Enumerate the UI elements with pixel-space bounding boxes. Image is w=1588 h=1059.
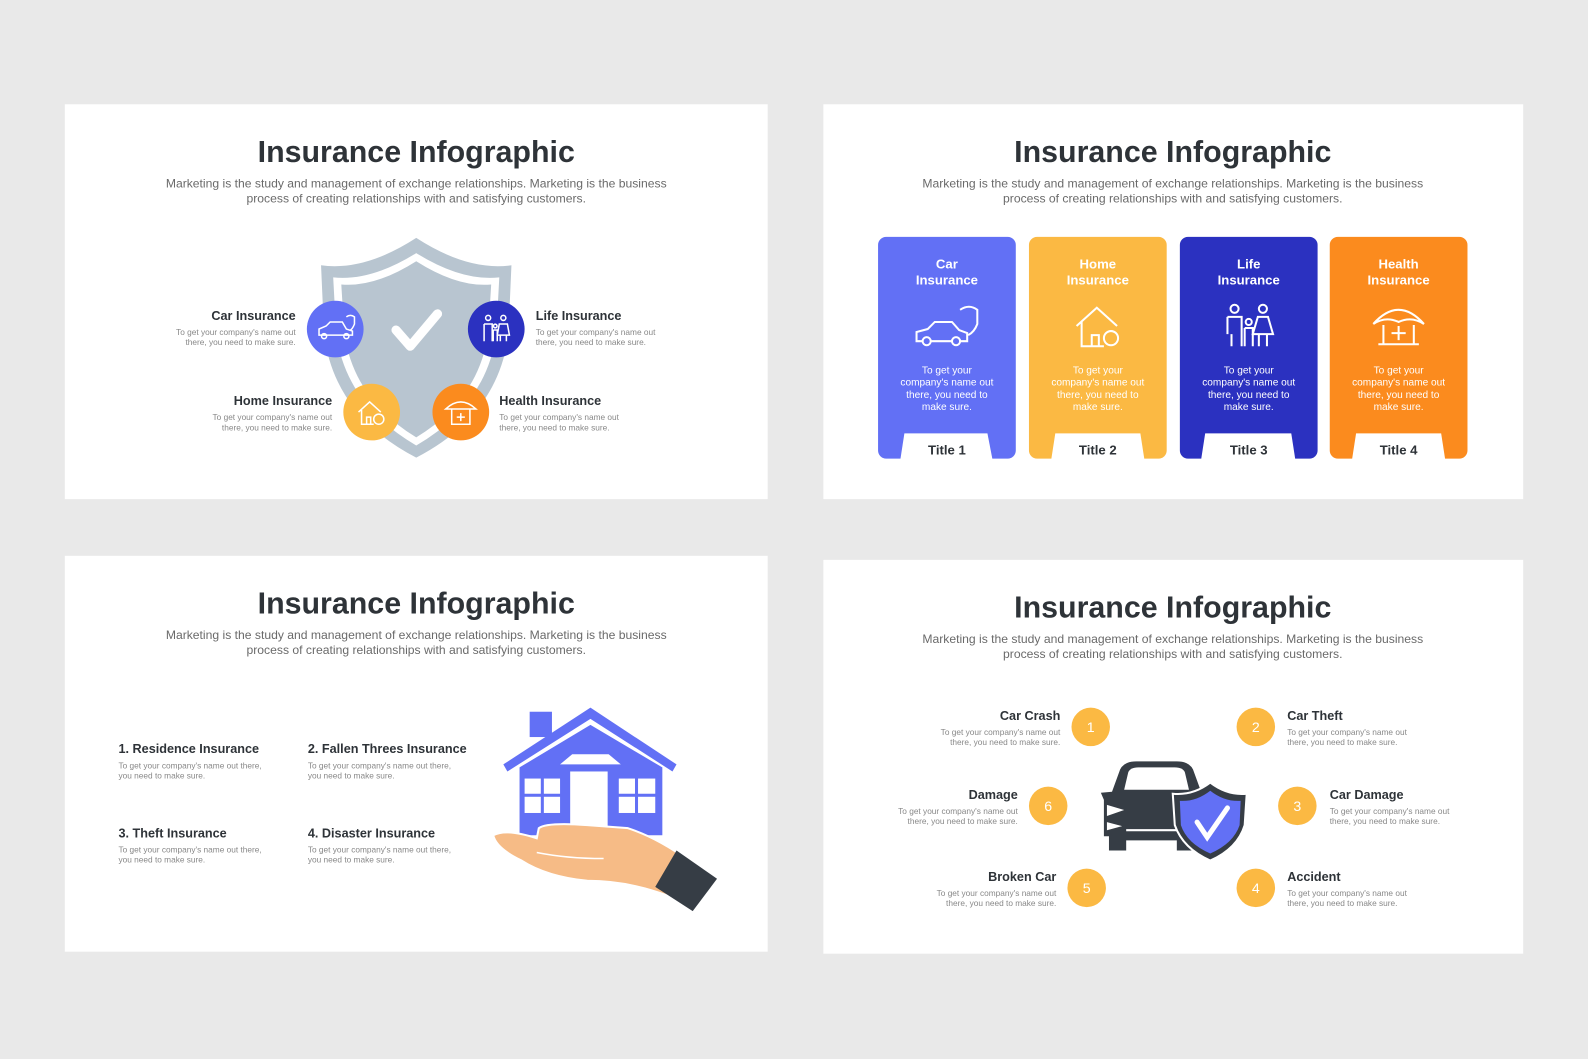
text: car insurance: Car Insurance (211, 309, 296, 323)
card: home insurance: there, you need to (1057, 390, 1139, 401)
text: theft insurance: you need to make sure. (118, 855, 205, 865)
text: residence insurance (118, 742, 262, 781)
text: home insurance: To get your company's name out (213, 412, 333, 422)
subtitle (922, 176, 1423, 205)
subtitle: process of creating relationships with and satisfying customers. (246, 191, 586, 205)
step 4 accident: Accident (1287, 870, 1341, 884)
step 5 broken car: To get your company's name out (937, 888, 1057, 898)
step 3 car damage: there, you need to make sure. (1330, 816, 1440, 826)
step 4 accident (1237, 869, 1408, 908)
card: home insurance (1029, 237, 1167, 460)
card: health insurance (1330, 237, 1467, 460)
text: home insurance (213, 394, 333, 432)
card: health insurance: make sure. (1374, 402, 1424, 413)
step 4 accident: To get your company's name out (1287, 888, 1408, 898)
panel: cards (823, 104, 1523, 499)
step 2 car theft: there, you need to make sure. (1287, 737, 1397, 747)
text: car insurance (176, 309, 296, 347)
card: life insurance: there, you need to (1208, 390, 1290, 401)
card: car insurance: there, you need to (906, 390, 988, 401)
illustration: house on hand (493, 708, 717, 911)
text: health insurance: Health Insurance (499, 394, 601, 408)
text: disaster insurance (308, 826, 451, 865)
card: home insurance: Home (1080, 256, 1116, 271)
card: home insurance: make sure. (1073, 402, 1123, 413)
icon: health circle (432, 384, 489, 440)
card: home insurance: company's name out (1051, 378, 1145, 389)
text: life insurance (536, 309, 656, 347)
card: car insurance (878, 237, 1016, 460)
text: fallen threes insurance: 2. Fallen Threes Insurance (308, 742, 467, 756)
step 3 car damage: Car Damage (1330, 788, 1404, 802)
icon: home circle (343, 384, 400, 440)
step 6 damage (898, 787, 1067, 826)
text: disaster insurance: 4. Disaster Insurance (308, 826, 435, 840)
text: fallen threes insurance: To get your company's name out there, (308, 760, 451, 770)
step 1 car crash: there, you need to make sure. (950, 737, 1060, 747)
step 1 car crash (941, 708, 1110, 747)
card: health insurance: Health (1379, 256, 1419, 271)
card: health insurance: To get your (1374, 366, 1424, 377)
step 5 broken car: there, you need to make sure. (946, 898, 1056, 908)
panel: car protection (823, 560, 1523, 954)
card: car insurance: Title 1 (928, 443, 966, 458)
text: theft insurance: 3. Theft Insurance (118, 826, 227, 840)
subtitle: Marketing is the study and management of exchange relationships. Marketing is the business (166, 628, 667, 642)
title: Insurance Infographic (258, 588, 575, 621)
step 2 car theft: To get your company's name out (1287, 727, 1408, 737)
panel: house in hand (65, 556, 768, 952)
panel: shield overview (65, 104, 768, 499)
text: car insurance: To get your company's name out (176, 327, 296, 337)
card: car insurance: Car (936, 256, 958, 271)
text: disaster insurance: To get your company's name out there, (308, 844, 451, 854)
title: Insurance Infographic (258, 136, 575, 169)
card: health insurance: company's name out (1352, 378, 1445, 389)
step 3 car damage (1278, 787, 1450, 826)
step 4 accident: there, you need to make sure. (1287, 898, 1397, 908)
card: health insurance: Insurance (1368, 272, 1430, 287)
step 6 damage: Damage (969, 788, 1018, 802)
text: health insurance: there, you need to make sure. (499, 422, 610, 432)
subtitle: Marketing is the study and management of exchange relationships. Marketing is the business (922, 632, 1423, 646)
text: home insurance: Home Insurance (234, 394, 332, 408)
subtitle (922, 632, 1423, 661)
subtitle: process of creating relationships with and satisfying customers. (246, 643, 586, 657)
icon: life circle (468, 301, 525, 357)
card: life insurance: Life (1237, 256, 1260, 271)
card: life insurance (1180, 237, 1318, 460)
text: life insurance: To get your company's name out (536, 327, 656, 337)
text: residence insurance: 1. Residence Insurance (118, 742, 259, 756)
text: life insurance: Life Insurance (536, 309, 621, 323)
step 5 broken car: Broken Car (988, 870, 1056, 884)
card: car insurance: Insurance (916, 272, 978, 287)
card: life insurance: Insurance (1218, 272, 1280, 287)
card: car insurance: make sure. (922, 402, 972, 413)
card: life insurance: make sure. (1224, 402, 1274, 413)
icon: car with shield (1101, 761, 1247, 861)
step 5 broken car: 5 (1083, 881, 1091, 897)
card: home insurance: Title 2 (1079, 443, 1117, 458)
card: car insurance: company's name out (900, 378, 994, 389)
step 4 accident: 4 (1252, 881, 1260, 897)
step 2 car theft: 2 (1252, 720, 1260, 736)
step 2 car theft (1237, 708, 1408, 747)
text: theft insurance (118, 826, 262, 865)
text: life insurance: there, you need to make sure. (536, 337, 646, 347)
text: residence insurance: To get your company's name out there, (118, 760, 262, 770)
step 6 damage: 6 (1044, 799, 1052, 815)
text: fallen threes insurance: you need to make sure. (308, 771, 395, 781)
icon: large shield (321, 238, 511, 458)
text: car insurance: there, you need to make sure. (185, 337, 296, 347)
subtitle (166, 176, 667, 205)
subtitle (166, 628, 667, 657)
subtitle: Marketing is the study and management of exchange relationships. Marketing is the business (922, 176, 1423, 190)
text: home insurance: there, you need to make sure. (222, 422, 332, 432)
step 1 car crash: 1 (1087, 720, 1095, 736)
card: health insurance: Title 4 (1380, 443, 1418, 458)
step 3 car damage: To get your company's name out (1330, 806, 1450, 816)
text: theft insurance: To get your company's name out there, (118, 844, 262, 854)
subtitle: process of creating relationships with and satisfying customers. (1003, 647, 1343, 661)
card: life insurance: Title 3 (1230, 443, 1268, 458)
subtitle: Marketing is the study and management of exchange relationships. Marketing is the business (166, 176, 667, 190)
step 1 car crash: To get your company's name out (941, 727, 1061, 737)
card: car insurance: To get your (922, 366, 973, 377)
text: health insurance (499, 394, 620, 432)
title: Insurance Infographic (1014, 592, 1331, 625)
subtitle: process of creating relationships with and satisfying customers. (1003, 191, 1343, 205)
card: home insurance: To get your (1073, 366, 1123, 377)
card: life insurance: company's name out (1202, 378, 1295, 389)
text: disaster insurance: you need to make sure. (308, 855, 395, 865)
step 5 broken car (937, 869, 1106, 908)
icon: car circle (307, 301, 364, 357)
step 2 car theft: Car Theft (1287, 709, 1343, 723)
step 1 car crash: Car Crash (1000, 709, 1060, 723)
step 6 damage: To get your company's name out (898, 806, 1019, 816)
text: residence insurance: you need to make sure. (118, 771, 205, 781)
card: health insurance: there, you need to (1358, 390, 1440, 401)
text: health insurance: To get your company's name out (499, 412, 620, 422)
step 6 damage: there, you need to make sure. (908, 816, 1018, 826)
card: home insurance: Insurance (1067, 272, 1129, 287)
card: life insurance: To get your (1224, 366, 1274, 377)
title: Insurance Infographic (1014, 136, 1331, 169)
text: fallen threes insurance (308, 742, 467, 781)
step 3 car damage: 3 (1293, 799, 1301, 815)
